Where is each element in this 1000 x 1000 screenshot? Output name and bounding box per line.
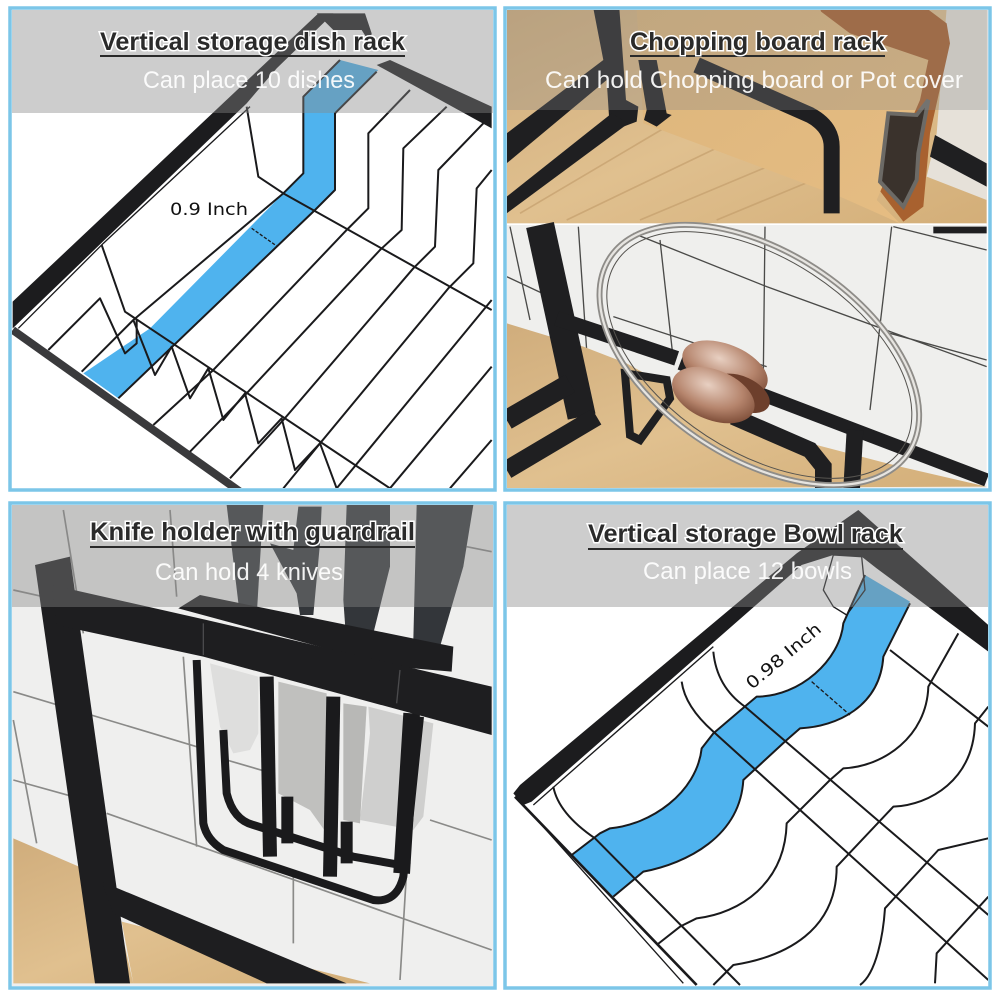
- tile wall: [10, 503, 493, 987]
- brown chopping board: [820, 8, 950, 222]
- header band: [12, 10, 493, 113]
- dish rack frame beams: [13, 13, 492, 492]
- panel: vertical storage bowl rack: [505, 503, 990, 988]
- heading: Vertical storage dish rack: [100, 28, 405, 56]
- heading: Vertical storage Bowl rack: [588, 520, 903, 548]
- bowl rack frame beams: [513, 510, 988, 805]
- heading: Chopping board rack: [630, 28, 885, 56]
- panel: vertical storage dish rack: [10, 8, 495, 492]
- wall on right: [927, 8, 987, 200]
- header band: [507, 10, 988, 110]
- chopping rack frame: [507, 8, 987, 213]
- panel: chopping board rack and pot cover: [505, 8, 990, 539]
- header band: [507, 505, 988, 607]
- wood grain lines: [520, 127, 813, 220]
- divider between photos: [507, 223, 987, 225]
- dish rack wires: [18, 60, 492, 488]
- subheading: Can hold 4 knives: [155, 559, 343, 586]
- counter wood: [507, 323, 987, 488]
- subheading: Can place 12 bowls: [643, 558, 852, 585]
- knife handles: [227, 505, 473, 647]
- knife holder basket: [197, 660, 420, 900]
- chopping board handle: [880, 100, 928, 207]
- panel border: [505, 8, 990, 490]
- pot cover rack frame: [507, 225, 987, 488]
- dimension label: 0.9 Inch: [170, 200, 248, 220]
- rail joints: [203, 623, 400, 703]
- bowl rack wires: [515, 555, 988, 985]
- blue highlighted dish slot: [83, 60, 378, 398]
- knife blades: [210, 663, 433, 833]
- panel border: [10, 503, 495, 988]
- subheading: Can hold Chopping board or Pot cover: [545, 67, 963, 94]
- header band: [12, 505, 493, 607]
- tile lines: [507, 227, 987, 410]
- panel border: [505, 503, 990, 988]
- subheading: Can place 10 dishes: [143, 67, 355, 94]
- wooden counter: [13, 838, 370, 983]
- light chopping board: [637, 8, 928, 223]
- dimension label: 0.98 Inch: [742, 619, 826, 694]
- blue highlighted bowl slot: [572, 575, 910, 897]
- heading: Knife holder with guardrail: [90, 518, 415, 546]
- lid knob: [672, 340, 770, 424]
- chopping board front rail: [697, 65, 832, 213]
- post and rails: [35, 557, 492, 983]
- upper photo: wood counter: [507, 8, 987, 225]
- knife holder top: [178, 595, 453, 672]
- glass pot lid rim: [596, 222, 922, 488]
- tile lines: [13, 510, 492, 980]
- panel border: [10, 8, 495, 490]
- lower photo: tile wall: [507, 225, 987, 488]
- panel: knife holder with guardrail: [10, 503, 495, 988]
